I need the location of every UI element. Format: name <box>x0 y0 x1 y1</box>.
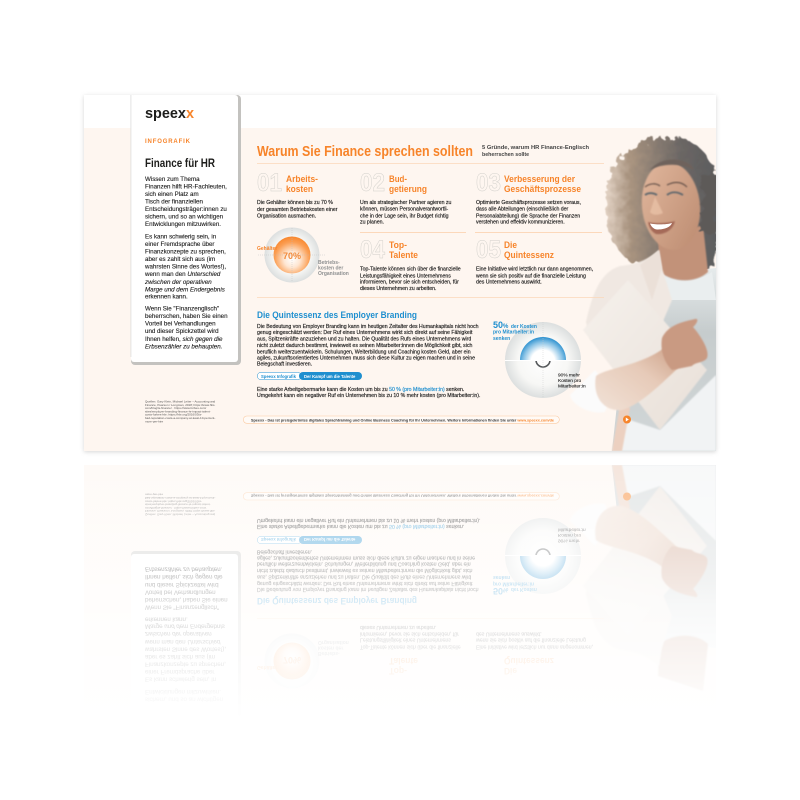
reflection: mirrored sheet fading out: Wenn Sie "Finanzenglisch" <box>145 604 219 610</box>
footnote: sources: costs-forbes-hbr; https://hbr.org/2016/03/a- <box>145 413 202 417</box>
reflection: mirrored sheet fading out: erkennen kann. <box>145 616 188 622</box>
reason 02: Budgetierung: getierung <box>389 184 427 195</box>
reflection: mirrored sheet fading out: Umgekehrt kann ein negativer Ruf ein Unternehmen bis zu 10 % mehr kosten (pro Mitarbeiter:in). <box>257 517 480 523</box>
reflection: mirrored sheet fading out: Speexx - Das ist preisgekröntes digitales Sprachtraining und Online Business Coaching für Ihr Unternehmen. Weitere Informationen finden Sie unter www.speexx.com/de <box>251 494 555 499</box>
footnote: sources: sites/employer-branding-finance-hr-impact-talent- <box>145 409 211 413</box>
jacket strap <box>612 400 630 451</box>
title: Warum Sie Finance sprechen sollten <box>257 143 473 160</box>
chart: employer branding cost: Kosten pro <box>558 378 582 384</box>
footer bar: Speexx - Das ist preisgekröntes digitales Sprachtraining und Online Business Coaching für Ihr Unternehmen. Weitere Informationen finden Sie unter www.speexx.com/de <box>251 417 555 422</box>
reflection: mirrored sheet fading out: more-per-hire <box>145 493 164 497</box>
reflection: mirrored sheet fading out: Quellen: Gary Klein, Michael Leiter – Accounting and <box>145 512 216 516</box>
sidebar body text: sichern, und so an wichtigen <box>145 214 224 220</box>
subtitle: 5 Gründe, warum HR Finance-Englisch <box>482 145 589 151</box>
sidebar body text: zwischen der operativen <box>144 279 212 286</box>
reflection: mirrored sheet fading out: aus, Spitzenkräfte anzuziehen und zu halten. Die Qualität des Rufs eines Unternehmens wird <box>257 574 471 580</box>
pills: Speexx Infografik link <box>257 372 362 380</box>
reflection: mirrored sheet fading out: genug eingeschätzt werden: Der Ruf eines Unternehmens wirkt sich direkt auf seine Fähigkeit <box>257 580 473 586</box>
footnote: sources: com/blog/is-finance/ · https://www.forbes.com/ <box>145 406 206 410</box>
reason 04: Top-Talente: Top-Talente können sich über die finanzielle <box>360 266 461 272</box>
sidebar body text: aber es zahlt sich aus (im <box>145 256 215 263</box>
subtitle <box>482 145 589 158</box>
reflection: mirrored sheet fading out: Der Kampf um die Talente <box>304 537 356 542</box>
reason 03: Geschäftsprozesse: Personalabteilung) die Sprache der Finanzen <box>476 214 580 220</box>
reflection: mirrored sheet fading out: Belegschaft investieren. <box>257 548 312 554</box>
reflection: mirrored sheet fading out: wenn sie sich positiv auf die finanzielle Leistung <box>476 636 586 642</box>
text block: 50 percent statement: Eine starke Arbeitgebermarke kann die Kosten um bis zu 50 % (pro Mitarbeiter:in) senken. <box>257 387 464 393</box>
footer bar <box>243 416 559 423</box>
reason 02: Budgetierung: 02 <box>360 169 385 197</box>
text block: 50 percent statement: Umgekehrt kann ein negativer Ruf ein Unternehmen bis zu 10 % mehr kosten (pro Mitarbeiter:in). <box>257 393 480 399</box>
reflection: mirrored sheet fading out: informieren, bevor sie sich entscheiden, für <box>360 630 459 636</box>
reflection: mirrored sheet fading out: zwischen der operativen <box>144 630 212 637</box>
reflection: mirrored sheet fading out: beherrschen, haben Sie einen <box>145 596 228 603</box>
reason 04: Top-Talente: Leistungsfähigkeit eines Unternehmens <box>360 274 451 280</box>
reflection: mirrored sheet fading out: Top- <box>389 665 407 676</box>
heading: Employer Branding: Die Quintessenz des Employer Branding <box>257 310 417 321</box>
footnote: sources: bad-reputation-costs-a-company-at-least-10-percent- <box>145 416 215 420</box>
reason 01: Arbeitskosten: Arbeits- <box>286 174 318 185</box>
neck <box>658 225 708 280</box>
body shirt <box>612 268 716 451</box>
sidebar body text: Entwicklungen mitzuwirken. <box>145 221 221 228</box>
card: left sidebar <box>130 95 241 365</box>
reason 02: Budgetierung: Um als strategischer Partner agieren zu <box>360 200 452 206</box>
reflection: mirrored sheet fading out: pro Mitarbeiter:in <box>493 580 534 586</box>
sidebar body text: Finanzkonzepte zu sprechen, <box>145 248 226 256</box>
sidebar body text: sich einen Platz am <box>145 191 199 198</box>
text block: Employer Branding: aus, Spitzenkräfte anzuziehen und zu halten. Die Qualität des Rufs eines Unternehmens wird <box>257 336 471 342</box>
sidebar body text: wahrsten Sinne des Wortes!), <box>144 264 226 270</box>
reflection: mirrored sheet fading out: dieses Unternehmen zu arbeiten. <box>360 624 436 630</box>
chart: 70 percent salaries <box>257 228 349 282</box>
sidebar body text: Marge und dem Endergebnis <box>145 286 225 294</box>
reflection: mirrored sheet fading out: Entwicklungen mitzuwirken. <box>145 688 221 695</box>
reflection: mirrored sheet fading out: com/blog/is-finance/ · https://www.forbes.com/ <box>145 506 206 510</box>
reflection: mirrored sheet fading out: beruflich weiterzuentwickeln. Schulungen, Weiterbildung und Coaching kosten Geld, aber ein <box>257 560 471 566</box>
reason 05: Die Quintessenz: 05 <box>476 236 501 264</box>
reflection: mirrored sheet fading out: Marge und dem Endergebnis <box>145 622 225 630</box>
reflection: mirrored sheet fading out: Finanzkonzepte zu sprechen, <box>145 660 226 668</box>
reflection: mirrored sheet fading out: Kosten pro <box>558 532 582 538</box>
reflection: mirrored sheet fading out: Die Quintessenz des Employer Branding <box>257 595 417 606</box>
reflection: mirrored sheet fading out: bad-reputation-costs-a-company-at-least-10-percent- <box>145 496 215 500</box>
reflection: mirrored sheet fading out: 50% der Kosten <box>493 586 537 596</box>
eyes and brows <box>645 183 687 195</box>
reason 04: Top-Talente <box>360 236 461 292</box>
subtitle: beherrschen sollte <box>482 152 529 158</box>
chart: employer branding cost: Mitarbeiter:in <box>558 384 586 390</box>
chart: employer branding cost <box>493 320 586 398</box>
label: Infografik: INFOGRAFIK <box>145 139 191 145</box>
text block: Employer Branding: genug eingeschätzt werden: Der Ruf eines Unternehmens wirkt sich direkt auf seine Fähigkeit <box>257 330 473 336</box>
reason 04: Top-Talente: informieren, bevor sie sich entscheiden, für <box>360 280 459 286</box>
reflection: mirrored sheet fading out <box>84 465 716 694</box>
reason 01: Arbeitskosten: 01 <box>257 169 282 197</box>
reflection: mirrored sheet fading out: Die Bedeutung von Employer Branding kann im heutigen Zeitalter des Humankapitals nicht hoch <box>257 586 479 592</box>
reason 01: Arbeitskosten: Die Gehälter können bis zu 70 % <box>257 200 333 206</box>
reflection: mirrored sheet fading out: Betriebs- <box>318 650 340 656</box>
chart: employer branding cost: pro Mitarbeiter:in <box>493 330 534 336</box>
reflection: mirrored sheet fading out: agiles, zukunftsorientiertes Unternehmen muss sich diese Kultur zu eigen machen und in seine <box>257 554 475 560</box>
reason 05: Die Quintessenz: Die <box>504 240 517 251</box>
pills: Speexx Infografik link: Der Kampf um die Talente <box>304 374 356 379</box>
reflection: mirrored sheet fading out: sichern, und so an wichtigen <box>145 696 224 702</box>
reason 01: Arbeitskosten: Organisation ausmachen. <box>257 214 316 220</box>
reflection: mirrored sheet fading out: Organisation <box>318 639 349 645</box>
reflection: mirrored sheet fading out: wenn man den Unterschied <box>144 638 221 645</box>
sidebar body text: erkennen kann. <box>145 294 188 300</box>
reason 03: Geschäftsprozesse: dass alle Abteilungen (einschließlich der <box>476 206 569 212</box>
reason 01: Arbeitskosten <box>257 169 338 220</box>
photo: woman holding laptop <box>570 137 720 451</box>
chart: employer branding cost: senken <box>493 336 510 342</box>
reflection: mirrored sheet fading out: Leistungsfähigkeit eines Unternehmens <box>360 636 451 642</box>
reflection: mirrored sheet fading out: Die <box>504 665 517 676</box>
chart: 70 percent salaries: Organisation <box>318 271 349 277</box>
sidebar body text: wenn man den Unterschied <box>144 271 221 278</box>
footnote: sources <box>145 400 216 423</box>
sidebar body text: einer Fremdsprache über <box>145 241 214 248</box>
reflection: mirrored sheet fading out: Mitarbeiter:in <box>558 526 586 532</box>
sidebar body text <box>144 176 228 350</box>
text block: Employer Branding: Die Bedeutung von Employer Branding kann im heutigen Zeitalter des Humankapitals nicht hoch <box>257 324 479 330</box>
reflection: mirrored sheet fading out: Finance, Pearson / Longman, 2018; https://www.hbs. <box>145 509 216 513</box>
reason 04: Top-Talente: dieses Unternehmen zu arbeiten. <box>360 286 436 292</box>
hair <box>605 137 720 272</box>
sidebar body text: Finanzen hilft HR-Fachleuten, <box>145 184 227 190</box>
reflection: mirrored sheet fading out: Quintessenz <box>504 655 554 666</box>
sidebar body text: Es kann schwierig sein, in <box>145 234 217 240</box>
text block: Employer Branding <box>257 324 479 368</box>
chart: 70 percent salaries: Betriebs- <box>318 260 340 266</box>
text block: 50 percent statement <box>257 387 480 399</box>
text block: Employer Branding: beruflich weiterzuentwickeln. Schulungen, Weiterbildung und Coaching kosten Geld, aber ein <box>257 350 471 356</box>
text block: Employer Branding: nicht zuletzt dadurch bestimmt, inwieweit es seinen Mitarbeiter:innen die Möglichkeit gibt, sich <box>257 343 472 349</box>
sleeve <box>571 372 606 412</box>
text block: Employer Branding: agiles, zukunftsorientiertes Unternehmen muss sich diese Kultur zu eigen machen und in seine <box>257 356 475 362</box>
reflection: mirrored sheet fading out: Es kann schwierig sein, in <box>145 676 217 682</box>
reflection: mirrored sheet fading out: des Unternehmens auswirkt. <box>476 630 542 636</box>
reflection: mirrored sheet fading out: costs-forbes-hbr; https://hbr.org/2016/03/a- <box>145 499 202 503</box>
hand <box>661 319 708 370</box>
jacket <box>586 250 672 324</box>
icon: orange next button <box>623 416 631 424</box>
reflection: mirrored sheet fading out: Speexx Infografik <box>261 537 297 542</box>
sidebar body text: Vorteil bei Verhandlungen <box>145 320 216 328</box>
chart: employer branding cost: 50% der Kosten <box>493 320 537 330</box>
reason 03: Geschäftsprozesse: Geschäftsprozesse <box>504 184 581 195</box>
reason 01: Arbeitskosten: der gesamten Betriebskosten einer <box>257 207 338 213</box>
reason 02: Budgetierung <box>360 169 452 226</box>
reflection: mirrored sheet fading out: Ihnen helfen, sich gegen die <box>145 573 223 580</box>
reflection: mirrored sheet fading out: Eine Initiative wird letztlich nur dann angenommen, <box>476 644 593 650</box>
pills: Speexx Infografik link: Speexx Infografik <box>261 374 297 379</box>
sidebar heading: Finance für HR <box>145 158 216 170</box>
reflection: mirrored sheet fading out: Erbsenzähler zu behaupten. <box>145 566 222 572</box>
footnote: sources: more-per-hire <box>145 419 164 423</box>
face <box>641 164 701 246</box>
reason 05: Die Quintessenz: wenn sie sich positiv auf die finanzielle Leistung <box>476 274 586 280</box>
reason 03: Geschäftsprozesse: Verbesserung der <box>504 174 575 185</box>
panel: infographic sheet <box>84 95 720 452</box>
reason 03: Geschäftsprozesse: 03 <box>476 169 501 197</box>
reason 02: Budgetierung: können, müssen Personalverantwortli- <box>360 206 449 212</box>
reason 04: Top-Talente: Talente <box>389 250 418 261</box>
logo: speexx: speexx <box>145 105 195 122</box>
chart: 70 percent salaries: Gehälter <box>257 246 277 252</box>
shirt lower <box>612 375 716 451</box>
sidebar body text: beherrschen, haben Sie einen <box>145 313 228 320</box>
reflection: mirrored sheet fading out: Gehälter <box>257 664 277 670</box>
reflection: mirrored sheet fading out: und dieser Spickzettel wird <box>145 581 219 588</box>
reason 02: Budgetierung: zu planen. <box>360 220 384 226</box>
reflection: mirrored sheet fading out: nicht zuletzt dadurch bestimmt, inwieweit es seinen Mitarbeiter:innen die Möglichkeit gibt, sich <box>257 567 472 573</box>
chart: 70 percent salaries: 70% <box>283 251 301 261</box>
reason 01: Arbeitskosten: kosten <box>286 184 313 195</box>
sidebar body text: Entscheidungsträger:innen zu <box>145 206 227 213</box>
chart: 70 percent salaries: kosten der <box>318 266 343 272</box>
footnote: sources: Finance, Pearson / Longman, 2018; https://www.hbs. <box>145 403 216 407</box>
reflection: mirrored sheet fading out: wahrsten Sinne des Wortes!), <box>144 646 226 652</box>
forearm <box>595 348 678 410</box>
reflection: mirrored sheet fading out: Top-Talente können sich über die finanzielle <box>360 644 461 650</box>
reason 03: Geschäftsprozesse <box>476 169 581 226</box>
reflection: mirrored sheet fading out: 90% mehr <box>558 538 580 544</box>
reason 05: Die Quintessenz <box>476 236 593 286</box>
reason 04: Top-Talente: Top- <box>389 240 407 251</box>
reason 03: Geschäftsprozesse: Optimierte Geschäftsprozesse setzen voraus, <box>476 200 581 206</box>
sidebar body text: und dieser Spickzettel wird <box>145 328 219 335</box>
reflection: mirrored sheet fading out: einer Fremdsprache über <box>145 668 214 675</box>
footnote: sources: Quellen: Gary Klein, Michael Leiter – Accounting and <box>145 400 216 404</box>
sidebar body text: Wissen zum Thema <box>145 176 200 183</box>
reason 02: Budgetierung: Bud- <box>389 174 407 185</box>
reflection: mirrored sheet fading out: senken <box>493 574 510 580</box>
nose shading <box>650 197 663 215</box>
sidebar body text: Tisch der finanziellen <box>145 198 203 206</box>
reason 05: Die Quintessenz: Eine Initiative wird letztlich nur dann angenommen, <box>476 266 593 272</box>
text block: Employer Branding: Belegschaft investieren. <box>257 362 312 368</box>
reason 05: Die Quintessenz: Quintessenz <box>504 250 554 261</box>
reflection: mirrored sheet fading out: Vorteil bei Verhandlungen <box>145 588 216 596</box>
sidebar body text: Wenn Sie "Finanzenglisch" <box>145 306 219 312</box>
reason 05: Die Quintessenz: des Unternehmens auswirkt. <box>476 280 542 286</box>
reason 04: Top-Talente: 04 <box>360 236 385 264</box>
reflection: mirrored sheet fading out: 70% <box>283 655 301 665</box>
sidebar body text: Erbsenzähler zu behaupten. <box>145 344 222 350</box>
reflection: mirrored sheet fading out: kosten der <box>318 644 343 650</box>
reason 02: Budgetierung: che in der Lage sein, ihr Budget richtig <box>360 214 449 220</box>
reason 03: Geschäftsprozesse: verstehen und effektiv kommunizieren. <box>476 220 565 226</box>
reflection: mirrored sheet fading out: aber es zahlt sich aus (im <box>145 653 215 660</box>
chart: employer branding cost: 90% mehr <box>558 372 580 378</box>
mouth <box>648 221 675 234</box>
laptop <box>584 320 707 430</box>
reflection: mirrored sheet fading out: Talente <box>389 655 418 666</box>
reflection: mirrored sheet fading out: sites/employer-branding-finance-hr-impact-talent- <box>145 503 211 507</box>
reflection: mirrored sheet fading out: Eine starke Arbeitgebermarke kann die Kosten um bis zu 50 % (pro Mitarbeiter:in) senken. <box>257 523 464 529</box>
sidebar body text: Ihnen helfen, sich gegen die <box>145 336 223 343</box>
